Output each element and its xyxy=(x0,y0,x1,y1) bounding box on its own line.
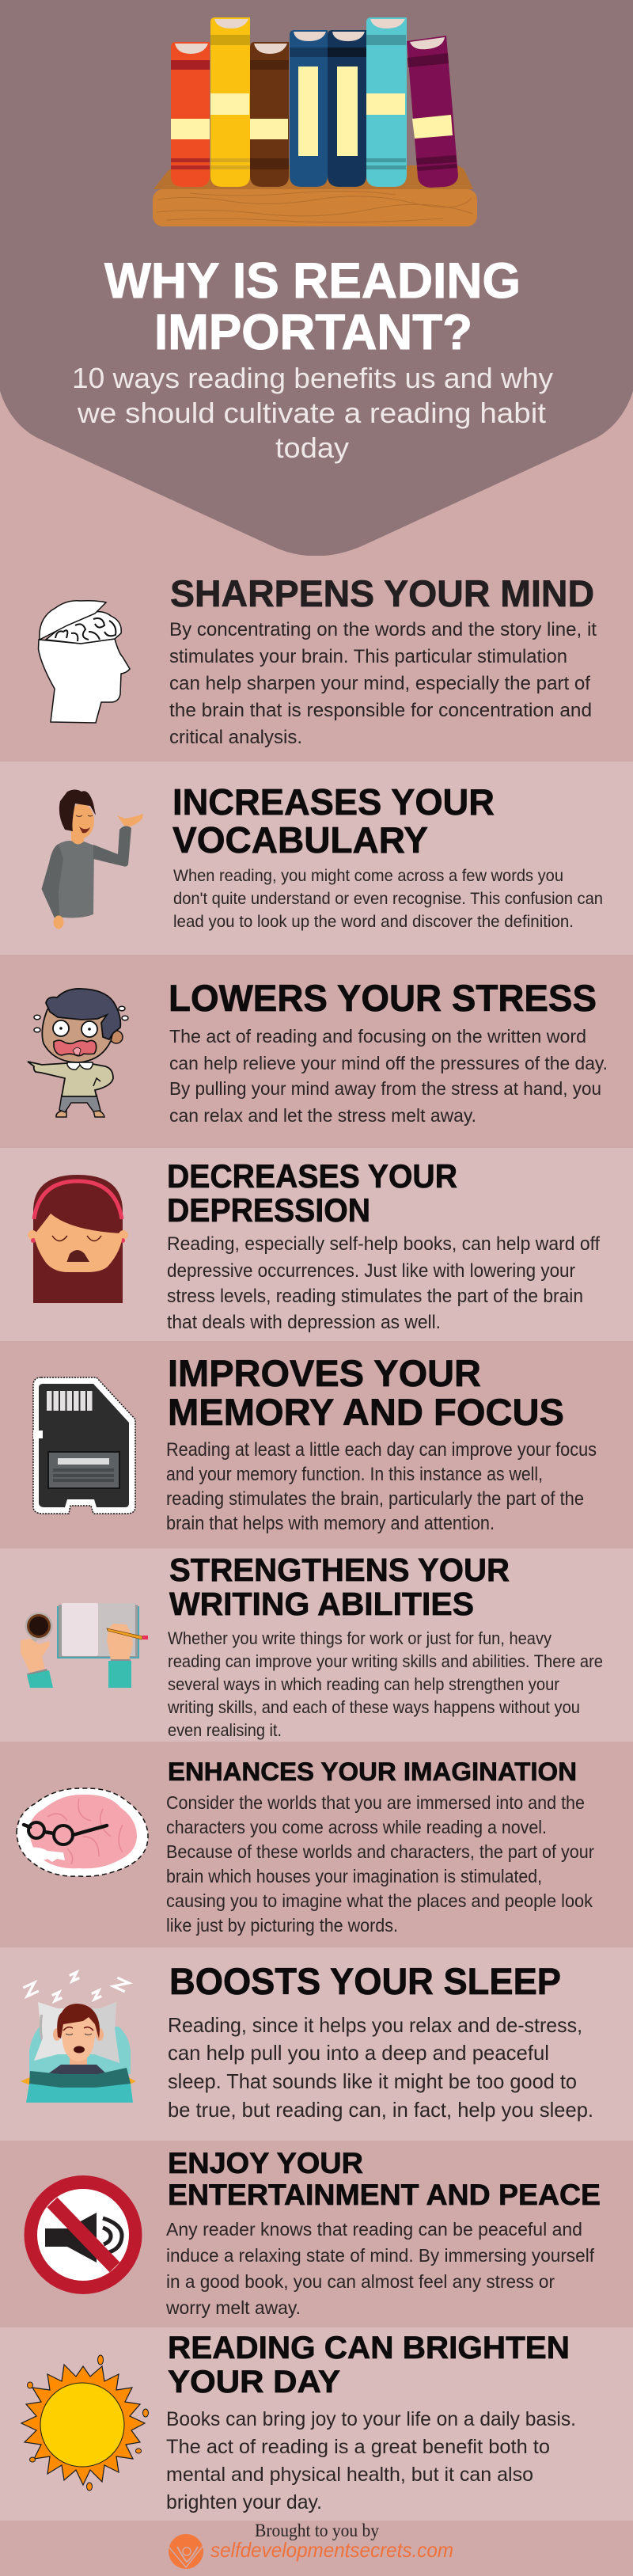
body text xyxy=(166,1792,594,1936)
panel: enhances your imagination xyxy=(0,1742,633,1947)
body text xyxy=(166,1439,597,1534)
body text: writing skills, and each of these ways happens without you xyxy=(167,1697,580,1717)
panel: increases your vocabulary xyxy=(0,762,633,955)
heading xyxy=(168,2331,570,2399)
body text: Books can bring joy to your life on a daily basis. xyxy=(166,2408,576,2430)
body text: the brain that is responsible for concentration and xyxy=(169,700,592,721)
icon: memory card xyxy=(33,1377,135,1514)
body text: Reading, since it helps you relax and de-stress, xyxy=(168,2013,582,2037)
title: IMPORTANT? xyxy=(154,305,472,360)
body text: brighten your day. xyxy=(166,2491,322,2513)
heading: IMPROVES YOUR xyxy=(168,1352,481,1394)
body text: worry melt away. xyxy=(165,2297,301,2318)
body text: brain that helps with memory and attention. xyxy=(166,1513,495,1534)
icon: man gesturing xyxy=(41,790,143,929)
body text: don't quite understand or even recognise. This confusion can xyxy=(173,890,603,908)
body text: like just by picturing the words. xyxy=(166,1915,398,1936)
panel: improves your memory and focus xyxy=(0,1341,633,1548)
body text: Because of these worlds and characters, the part of your xyxy=(166,1841,594,1862)
heading: ENJOY YOUR xyxy=(168,2147,363,2179)
body text: characters you come across while reading a novel. xyxy=(166,1817,547,1837)
body text: that deals with depression as well. xyxy=(167,1312,441,1333)
body text: can relax and let the stress melt away. xyxy=(169,1105,476,1126)
body text: can help pull you into a deep and peaceful xyxy=(168,2041,549,2065)
heading: ENTERTAINMENT AND PEACE xyxy=(168,2179,601,2211)
body text: depressive occurrences. Just like with lowering your xyxy=(167,1260,575,1282)
icon: sleeping man in bed xyxy=(21,1972,136,2103)
panel: decreases your depression xyxy=(0,1148,633,1341)
heading: YOUR DAY xyxy=(168,2365,340,2399)
body text: Whether you write things for work or just for fun, heavy xyxy=(168,1628,552,1648)
body text xyxy=(169,619,597,748)
body text xyxy=(168,2013,593,2122)
body text: can help sharpen your mind, especially the part of xyxy=(169,673,590,694)
icon: no-sound sign xyxy=(24,2175,142,2294)
website name: selfdevelopmentsecrets.com xyxy=(210,2538,453,2562)
title: WHY IS READING xyxy=(104,253,521,309)
body text: be true, but reading can, in fact, help you sleep. xyxy=(168,2098,593,2122)
body text: several ways in which reading can help strengthen your xyxy=(168,1674,559,1694)
heading xyxy=(168,2147,601,2211)
body text: The act of reading and focusing on the written word xyxy=(169,1026,586,1047)
heading xyxy=(169,1552,510,1622)
subtitle xyxy=(72,362,553,464)
body text: Reading at least a little each day can improve your focus xyxy=(166,1439,597,1461)
panel: boosts your sleep xyxy=(0,1947,633,2141)
heading: DEPRESSION xyxy=(167,1191,370,1229)
body text xyxy=(167,1233,600,1333)
body text: Consider the worlds that you are immersed into and the xyxy=(166,1792,585,1813)
panel: reading can brighten your day xyxy=(0,2327,633,2521)
subtitle: today xyxy=(275,431,349,464)
heading: MEMORY AND FOCUS xyxy=(168,1391,564,1433)
body text: The act of reading is a great benefit both to xyxy=(166,2436,550,2458)
body text: causing you to imagine what the places and people look xyxy=(166,1890,593,1911)
logo icon xyxy=(169,2534,208,2569)
heading: LOWERS YOUR STRESS xyxy=(169,977,597,1019)
body text xyxy=(167,1628,603,1740)
subtitle: we should cultivate a reading habit xyxy=(77,397,546,429)
body text xyxy=(173,867,603,931)
body text xyxy=(169,1026,608,1126)
panel: lowers your stress xyxy=(0,955,633,1148)
icon: hands writing in notebook with coffee xyxy=(21,1603,148,1688)
body text: critical analysis. xyxy=(169,727,302,748)
body text: brain which houses your imagination is stimulated, xyxy=(166,1866,542,1886)
icon: sad girl xyxy=(28,1175,128,1303)
body text: When reading, you might come across a few words you xyxy=(173,867,563,885)
body text: Reading, especially self-help books, can help ward off xyxy=(167,1233,600,1255)
heading: STRENGTHENS YOUR xyxy=(169,1552,510,1588)
body text: stress levels, reading stimulates the part of the brain xyxy=(167,1286,583,1307)
body text: induce a relaxing state of mind. By immersing yourself xyxy=(166,2245,595,2266)
body text: and your memory function. In this instance as well, xyxy=(166,1464,543,1485)
body text: in a good book, you can almost feel any stress or xyxy=(166,2271,555,2292)
body text: By pulling your mind away from the stress at hand, you xyxy=(169,1078,601,1099)
title xyxy=(104,253,521,360)
icon: stressed boy pointing xyxy=(28,989,128,1117)
header panel xyxy=(0,0,633,556)
body text xyxy=(166,2408,576,2513)
panel: strengthens your writing abilities xyxy=(0,1548,633,1742)
body text xyxy=(165,2219,595,2318)
heading: SHARPENS YOUR MIND xyxy=(170,572,594,614)
heading: INCREASES YOUR xyxy=(172,781,495,823)
subtitle: 10 ways reading benefits us and why xyxy=(72,362,553,394)
heading xyxy=(172,781,495,861)
heading: ENHANCES YOUR IMAGINATION xyxy=(168,1757,577,1786)
panel: footer xyxy=(0,2521,633,2576)
body text: reading can improve your writing skills and abilities. There are xyxy=(168,1651,603,1671)
body text: reading stimulates the brain, particularly the part of the xyxy=(166,1488,584,1510)
heading xyxy=(168,1352,564,1433)
credit line: Brought to you by xyxy=(255,2521,379,2540)
panel: enjoy your entertainment and peace xyxy=(0,2141,633,2327)
heading xyxy=(167,1157,457,1229)
icon: sun xyxy=(21,2355,149,2491)
heading: DECREASES YOUR xyxy=(167,1157,457,1195)
heading: READING CAN BRIGHTEN xyxy=(168,2331,570,2365)
body text: even realising it. xyxy=(168,1720,282,1740)
body text: mental and physical health, but it can also xyxy=(166,2464,533,2486)
body text: sleep. That sounds like it might be too good to xyxy=(168,2069,577,2093)
body text: stimulates your brain. This particular stimulation xyxy=(169,646,567,667)
icon: open head with brain xyxy=(38,601,130,723)
icon: pink brain with glasses xyxy=(17,1788,148,1876)
illustration: books on a wooden shelf xyxy=(153,17,477,226)
body text: lead you to look up the word and discover the definition. xyxy=(173,913,574,931)
heading: WRITING ABILITIES xyxy=(169,1586,474,1622)
heading: BOOSTS YOUR SLEEP xyxy=(169,1960,561,2002)
body text: Any reader knows that reading can be peaceful and xyxy=(166,2219,582,2240)
panel: sharpens your mind xyxy=(0,556,633,762)
body text: can help relieve your mind off the pressures of the day. xyxy=(169,1053,608,1073)
body text: By concentrating on the words and the story line, it xyxy=(169,619,597,640)
heading: VOCABULARY xyxy=(172,819,428,861)
